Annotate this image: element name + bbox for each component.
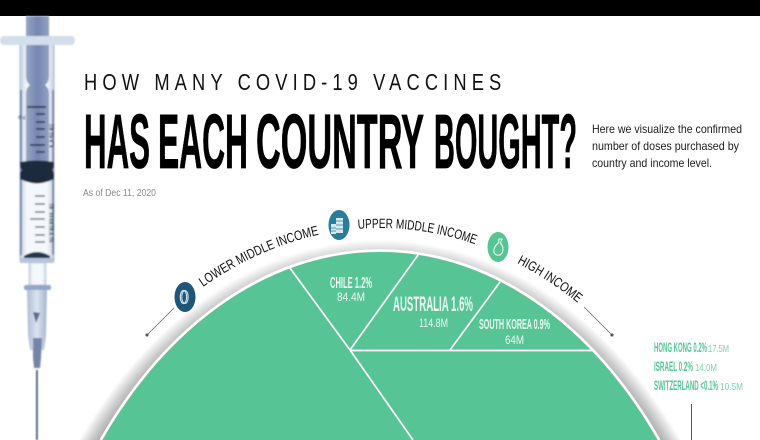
category: upper middle income (328, 210, 478, 244)
label: South Korea (479, 316, 550, 347)
chart green area (102, 252, 658, 440)
row: Israel: 14.0M (695, 362, 717, 374)
intro paragraph (592, 122, 742, 170)
barrel print: STERILE (49, 202, 56, 243)
rubber stopper (20, 160, 54, 184)
pointer arrow left (146, 308, 174, 336)
syringe barrel (20, 44, 54, 261)
semicircle chart (0, 200, 760, 440)
label: Chile: 84.4M (337, 292, 365, 304)
hub collar (24, 285, 51, 290)
date note: As of Dec 11, 2020 (83, 187, 156, 199)
label: Australia: 114.8M (419, 318, 448, 330)
label text: LOWER MIDDLE INCOME (198, 226, 319, 286)
needle (36, 370, 38, 440)
plunger body (26, 45, 49, 161)
main title (84, 99, 577, 185)
finger flange (0, 36, 75, 45)
category: high income (488, 232, 614, 337)
icon: coin (174, 282, 196, 312)
row: Hong Kong: 17.5M (708, 343, 729, 355)
subtitle heading: HOW MANY COVID-19 VACCINES (84, 70, 501, 96)
intro paragraph: number of doses purchased by (592, 139, 739, 153)
small countries list (654, 340, 743, 393)
fluid tick marks (30, 196, 45, 242)
semicircle chart: SOUTH KOREA 0.9% (479, 316, 550, 333)
main title: HAS (84, 99, 150, 185)
barrel collar (20, 258, 54, 263)
category: lower middle income (145, 226, 319, 337)
chart shadow (0, 200, 760, 440)
semicircle chart: CHILE 1.2% (330, 275, 372, 292)
label text: HIGH INCOME (518, 255, 584, 303)
label: South Korea: 64M (505, 333, 524, 347)
barrel side shading (21, 90, 53, 255)
plunger rod (26, 16, 49, 46)
row: Switzerland: 10.5M (720, 381, 743, 393)
hub inner (33, 312, 40, 323)
intro paragraph: Here we visualize the confirmed (592, 122, 742, 136)
leader line (691, 404, 692, 440)
main title: EACH (158, 99, 248, 185)
main title: COUNTRY (256, 99, 424, 185)
label: Australia (393, 293, 473, 330)
scale number: 2 (17, 115, 27, 120)
top black bar (0, 0, 760, 16)
syringe illustration (0, 16, 75, 440)
row: Israel: ISRAEL 0.2% (654, 359, 693, 374)
hub cone (27, 290, 47, 350)
needle shield (33, 338, 42, 368)
semicircle chart: AUSTRALIA 1.6% (393, 293, 473, 316)
needle hub neck (29, 263, 46, 285)
plunger tick marks (27, 107, 46, 152)
icon: money bag (488, 232, 508, 262)
icon: coin stacks (328, 210, 350, 240)
intro paragraph: country and income level. (592, 156, 712, 170)
label: Chile (330, 275, 372, 304)
pointer arrow right (584, 307, 613, 336)
barrel base (24, 252, 50, 259)
chart white rim (101, 250, 659, 440)
barrel print upper: USE (49, 122, 56, 148)
label text: UPPER MIDDLE INCOME (358, 218, 478, 244)
treemap dividers (290, 255, 592, 440)
